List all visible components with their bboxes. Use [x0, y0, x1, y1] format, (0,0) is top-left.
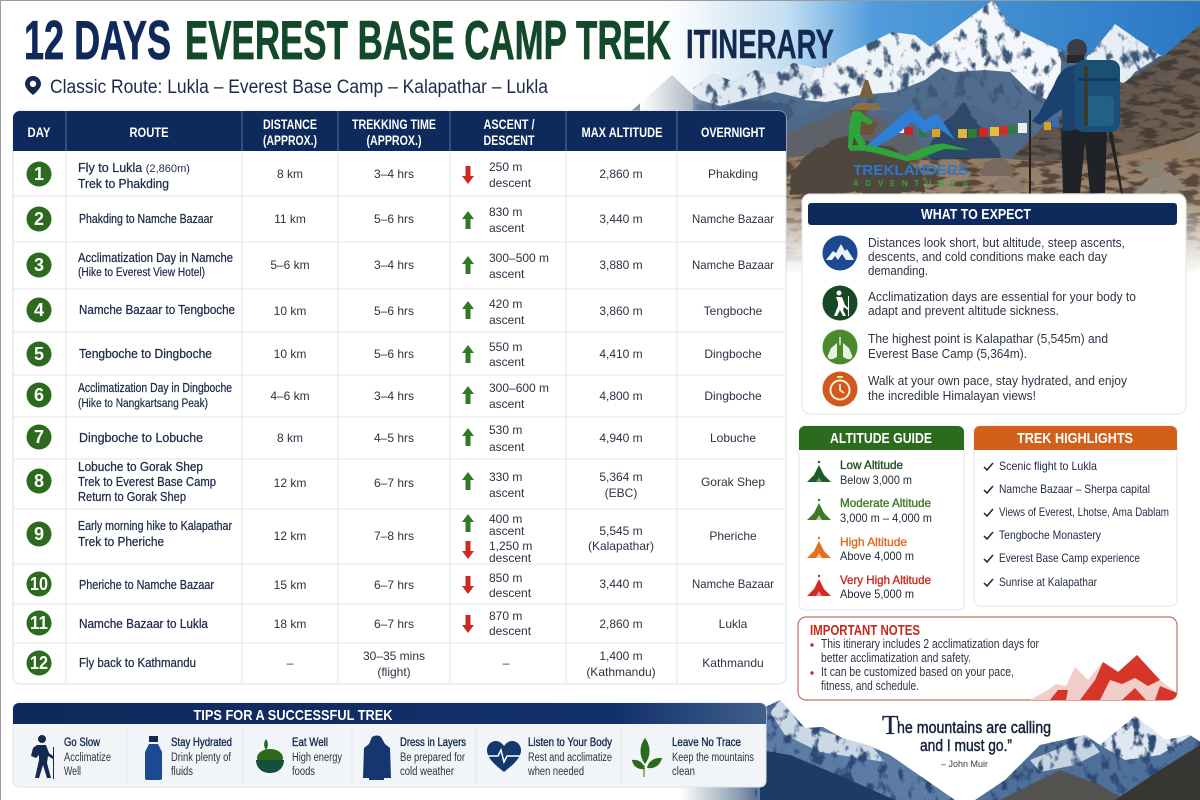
row: day 8: 8 — [34, 471, 44, 491]
row: day 4: ascent — [489, 313, 525, 327]
row: day 10: Pheriche to Namche Bazaar — [79, 578, 214, 592]
tip: go slow: Go Slow — [64, 735, 100, 749]
tip: eat well: High energy — [292, 752, 342, 764]
checklist: Namche Bazaar – Sherpa capital — [999, 482, 1150, 496]
row: day 7: Lobuche — [710, 431, 756, 445]
row: day 12: 30–35 mins — [363, 649, 425, 663]
row: day 9: 12 km — [274, 529, 306, 543]
row: day 2: 3,440 m — [599, 212, 643, 226]
row: day 11: 870 m — [489, 609, 522, 623]
row: day 1: descent — [489, 176, 532, 190]
row: day 5: ascent — [489, 355, 525, 369]
level: high altitude — [807, 535, 914, 563]
tip: go slow: Well — [64, 766, 81, 778]
row: day 4: 420 m — [489, 297, 522, 311]
row: day 11: descent — [489, 624, 532, 638]
row: day 9: 1,250 m — [489, 539, 532, 553]
row: day 5: 5 — [34, 344, 44, 364]
quote: – John Muir — [941, 759, 988, 770]
icon: leaves — [632, 738, 662, 777]
tip: stay hydrated — [145, 735, 232, 780]
row: day 1: 250 m — [489, 160, 522, 174]
row: day 1: 1 — [34, 164, 44, 184]
tip: leave no trace: clean — [672, 766, 695, 778]
row: day 8: 12 km — [274, 476, 306, 490]
tip: listen to your body: Rest and acclimatize — [528, 752, 612, 764]
table header: ROUTE — [130, 124, 168, 140]
row: day 8: 330 m — [489, 470, 522, 484]
row: day 10: 10 — [30, 574, 48, 594]
far range — [693, 1, 1164, 148]
title: 12 DAYS — [24, 9, 171, 71]
row: day 12: Fly back to Kathmandu — [79, 656, 196, 670]
icon: walker — [31, 735, 54, 779]
row: day 3: ascent — [489, 267, 525, 281]
notes list: fitness, and schedule. — [821, 679, 919, 693]
row: day 4: 10 km — [274, 304, 306, 318]
checklist: Everest Base Camp experience — [999, 551, 1140, 565]
row: day 9: descent — [489, 551, 532, 565]
row: day 9: ascent — [489, 524, 525, 538]
row: day 8: Gorak Shep — [701, 475, 765, 489]
level: moderate altitude: 3,000 m – 4,000 m — [840, 511, 932, 525]
row: day 1: Fly to Lukla (2,860m) — [78, 161, 190, 175]
tip: dress in layers — [363, 735, 466, 780]
notes list — [810, 637, 1039, 693]
row: day 6: Acclimatization Day in Dingboche — [78, 381, 232, 395]
text: distances: Distances look short, but altitude, steep ascents, — [868, 236, 1125, 250]
row: day 8 — [26, 460, 765, 504]
table header: MAX ALTITUDE — [582, 124, 662, 140]
level: very high altitude: Above 5,000 m — [840, 587, 914, 601]
illustration: red mountains — [1030, 655, 1177, 700]
cairn — [790, 80, 925, 195]
row: day 1: 3–4 hrs — [374, 167, 414, 181]
text: highest point: The highest point is Kalapathar (5,545m) and — [868, 332, 1108, 346]
table header: (APPROX.) — [366, 132, 422, 148]
logo: Treklanders Adventures: TREKLANDERS — [853, 162, 968, 179]
prayer flags — [896, 119, 1059, 138]
row: day 9: 9 — [34, 524, 44, 544]
tip: stay hydrated: Drink plenty of — [171, 752, 232, 764]
ground — [786, 135, 1200, 272]
trekker — [1029, 39, 1123, 194]
row: day 1: 8 km — [277, 167, 303, 181]
table header: DAY — [28, 124, 51, 140]
row: day 4: Namche Bazaar to Tengboche — [79, 303, 235, 317]
row: day 7 — [26, 423, 756, 454]
logo: Treklanders Adventures: ADVENTURES — [853, 179, 969, 188]
row: day 11: 2,860 m — [599, 617, 643, 631]
row: day 6: 4,800 m — [599, 389, 643, 403]
row: day 12: – — [503, 656, 510, 670]
quote — [882, 710, 1051, 770]
row: day 10: 3,440 m — [599, 577, 643, 591]
row: day 11: Lukla — [719, 617, 748, 631]
text: distances — [868, 236, 1125, 278]
row: day 9: 5,545 m — [599, 524, 643, 538]
row: day 11: 6–7 hrs — [374, 617, 414, 631]
row: day 9: Early morning hike to Kalapathar — [78, 519, 232, 533]
tip: eat well — [256, 735, 342, 778]
row: day 4: 3,860 m — [599, 304, 643, 318]
subtitle with location pin: Classic Route: Lukla – Everest Base Camp – Kalapathar – Lukla — [50, 77, 548, 98]
row: day 12: 1,400 m — [599, 649, 643, 663]
row: day 11: Namche Bazaar to Lukla — [79, 617, 208, 631]
row: day 2: 5–6 hrs — [374, 212, 414, 226]
row: day 4: 5–6 hrs — [374, 304, 414, 318]
level: very high altitude: Very High Altitude — [840, 573, 931, 587]
row: day 2: Phakding to Namche Bazaar — [79, 212, 213, 226]
row: day 11 — [26, 609, 748, 638]
row: day 9: (Kalapathar) — [588, 539, 654, 553]
row: day 7: 4–5 hrs — [374, 431, 414, 445]
quote: T — [882, 710, 899, 740]
row: day 7: Dingboche to Lobuche — [79, 431, 203, 445]
table header: (APPROX.) — [263, 132, 317, 148]
text: own pace — [868, 374, 1128, 403]
row: day 6: ascent — [489, 397, 525, 411]
heading: tips: TIPS FOR A SUCCESSFUL TREK — [194, 707, 393, 724]
row: day 1: Trek to Phakding — [78, 177, 169, 191]
row: day 9: 400 m — [489, 512, 522, 526]
text: acclimatization: adapt and prevent altitude sickness. — [868, 304, 1059, 318]
row: day 12: – — [287, 656, 294, 670]
row: day 9 — [26, 512, 757, 565]
table header: TREKKING TIME — [352, 116, 436, 132]
text: distances: descents, and cold conditions make each day — [868, 250, 1108, 264]
panel: trek highlights — [974, 426, 1177, 606]
icon: hiker — [822, 286, 858, 320]
row: day 2: 2 — [34, 209, 44, 229]
heading: altitude guide: ALTITUDE GUIDE — [830, 430, 932, 447]
icon: location pin — [25, 76, 41, 95]
row: day 5: Dingboche — [704, 347, 762, 361]
row: day 11: 18 km — [274, 617, 306, 631]
quote: and I must go.” — [920, 737, 1012, 755]
row: day 10: descent — [489, 586, 532, 600]
row: day 12: 12 — [30, 653, 48, 673]
panel: what to expect — [802, 194, 1186, 414]
row: day 6: Dingboche — [704, 389, 762, 403]
row: day 3: 5–6 km — [270, 258, 310, 272]
notes list: This itinerary includes 2 acclimatization days for — [821, 637, 1039, 651]
row: day 7: 8 km — [277, 431, 303, 445]
row: day 3: 3 — [34, 255, 44, 275]
panel: tips for a successful trek — [13, 703, 766, 787]
tip: listen to your body: Listen to Your Body — [528, 735, 612, 749]
row: day 2: 830 m — [489, 205, 522, 219]
row: day 12: Kathmandu — [702, 656, 764, 670]
row: day 1 — [26, 160, 758, 191]
table header: ASCENT / — [484, 116, 535, 132]
level: low altitude — [807, 458, 912, 487]
row: day 7: 530 m — [489, 423, 522, 437]
row: day 6: 3–4 hrs — [374, 389, 414, 403]
row: day 4: 4 — [34, 300, 44, 320]
row: day 6: 4–6 km — [270, 389, 310, 403]
quote: he mountains are calling — [897, 719, 1051, 737]
icon: bowl — [256, 739, 284, 773]
row: day 8: Return to Gorak Shep — [78, 490, 186, 504]
tip: go slow — [31, 735, 111, 779]
table header — [28, 116, 765, 148]
row: day 3: Namche Bazaar — [692, 258, 774, 272]
text: own pace: the incredible Himalayan views! — [868, 389, 1036, 403]
icon: lungs — [822, 330, 858, 364]
icon: mountains — [822, 236, 858, 270]
row: day 5 — [26, 340, 762, 369]
row: day 8: Lobuche to Gorak Shep — [78, 460, 203, 474]
notes list: better acclimatization and safety. — [821, 651, 971, 665]
row: day 12 — [26, 649, 764, 679]
row: day 4 — [26, 297, 763, 327]
tip: stay hydrated: fluids — [171, 766, 193, 778]
tip: listen to your body: when needed — [527, 766, 584, 778]
row: day 5: 5–6 hrs — [374, 347, 414, 361]
row: day 8: Trek to Everest Base Camp — [78, 475, 216, 489]
hero photo: Himalayan scene with trekker — [630, 0, 1200, 273]
panel: important notes — [798, 617, 1177, 700]
row: day 6: 6 — [34, 385, 44, 405]
checklist: Scenic flight to Lukla — [999, 459, 1097, 473]
tip: leave no trace — [632, 735, 754, 778]
checklist: Sunrise at Kalapathar — [999, 575, 1097, 589]
level: very high altitude — [807, 573, 931, 601]
row: day 8: (EBC) — [605, 486, 637, 500]
row: day 8: 6–7 hrs — [374, 476, 414, 490]
row: day 3: (Hike to Everest View Hotel) — [78, 267, 205, 279]
row: day 10: 850 m — [489, 571, 522, 585]
row: day 8: ascent — [489, 486, 525, 500]
text: highest point — [868, 332, 1108, 361]
level: low altitude: Below 3,000 m — [840, 473, 912, 487]
row: day 5: 10 km — [274, 347, 306, 361]
row: day 5: 550 m — [489, 340, 522, 354]
logo: Treklanders Adventures — [848, 108, 970, 188]
row: day 3: 300–500 m — [489, 251, 549, 265]
row: day 5: Tengboche to Dingboche — [79, 347, 212, 361]
level: low altitude: Low Altitude — [840, 458, 903, 472]
icon: stopwatch — [822, 372, 858, 406]
row: day 1: 2,860 m — [599, 167, 643, 181]
level: moderate altitude — [807, 496, 932, 525]
text: own pace: Walk at your own pace, stay hydrated, and enjoy — [868, 374, 1128, 388]
notes list: It can be customized based on your pace, — [821, 665, 1014, 679]
tip: eat well: foods — [292, 766, 315, 778]
title: ITINERARY — [686, 21, 834, 67]
heading: what to expect: WHAT TO EXPECT — [921, 206, 1031, 223]
text: distances: demanding. — [868, 264, 928, 278]
tip: eat well: Eat Well — [292, 735, 328, 749]
row: day 8: 5,364 m — [599, 470, 643, 484]
tip: leave no trace: Leave No Trace — [672, 735, 741, 749]
row: day 10: 15 km — [274, 578, 306, 592]
row: day 12: (Kathmandu) — [586, 665, 656, 679]
table header: DESCENT — [484, 132, 535, 148]
row: day 9: Trek to Pheriche — [78, 535, 164, 549]
row: day 2: 11 km — [274, 212, 306, 226]
icon: bottle — [145, 736, 162, 780]
row: day 7: ascent — [489, 440, 525, 454]
title: EVEREST BASE CAMP TREK — [185, 9, 671, 71]
row: day 3: Acclimatization Day in Namche — [78, 251, 233, 265]
row: day 12: (flight) — [377, 665, 411, 679]
tip: dress in layers: cold weather — [400, 766, 454, 778]
table header: OVERNIGHT — [701, 124, 765, 140]
level: high altitude: Above 4,000 m — [840, 549, 914, 563]
tip: leave no trace: Keep the mountains — [672, 752, 754, 764]
level: high altitude: High Altitude — [840, 535, 907, 549]
panel: altitude guide — [799, 426, 964, 610]
row: day 2: Namche Bazaar — [692, 212, 774, 226]
row: day 3 — [26, 251, 774, 281]
row: day 7: 7 — [34, 427, 44, 447]
heading: important notes: IMPORTANT NOTES — [810, 622, 920, 639]
itinerary table — [13, 111, 786, 684]
tip: dress in layers: Be prepared for — [400, 752, 465, 764]
row: day 6 — [26, 381, 762, 411]
row: day 4: Tengboche — [704, 304, 763, 318]
heading: trek highlights: TREK HIGHLIGHTS — [1017, 430, 1133, 447]
level: moderate altitude: Moderate Altitude — [840, 496, 931, 510]
fades — [640, 0, 715, 112]
row: day 10 — [26, 571, 774, 600]
row: day 6: (Hike to Nangkartsang Peak) — [78, 398, 208, 410]
icon: heart with pulse — [487, 741, 521, 772]
icon: jacket — [363, 736, 391, 780]
row: day 3: 3–4 hrs — [374, 258, 414, 272]
row: day 5: 4,410 m — [599, 347, 643, 361]
row: day 2: ascent — [489, 221, 525, 235]
row: day 10: 6–7 hrs — [374, 578, 414, 592]
checklist — [984, 459, 1169, 589]
tip: listen to your body — [487, 735, 612, 778]
text: acclimatization — [868, 290, 1136, 318]
text: highest point: Everest Base Camp (5,364m). — [868, 347, 1027, 361]
row: day 11: 11 — [30, 613, 48, 633]
checklist: Tengboche Monastery — [999, 528, 1101, 542]
table header: DISTANCE — [263, 116, 317, 132]
text: acclimatization: Acclimatization days are essential for your body to — [868, 290, 1136, 304]
tip: dress in layers: Dress in Layers — [400, 735, 466, 749]
tip: stay hydrated: Stay Hydrated — [171, 735, 232, 749]
tip: go slow: Acclimatize — [64, 752, 111, 764]
row: day 9: Pheriche — [709, 529, 757, 543]
row: day 2 — [26, 205, 774, 235]
row: day 10: Namche Bazaar — [692, 577, 774, 591]
row: day 9: 7–8 hrs — [374, 529, 414, 543]
row: day 1: Phakding — [708, 167, 758, 181]
row: day 6: 300–600 m — [489, 381, 549, 395]
bottom mountains scene — [680, 698, 1200, 800]
row: day 3: 3,880 m — [599, 258, 643, 272]
row: day 7: 4,940 m — [599, 431, 643, 445]
